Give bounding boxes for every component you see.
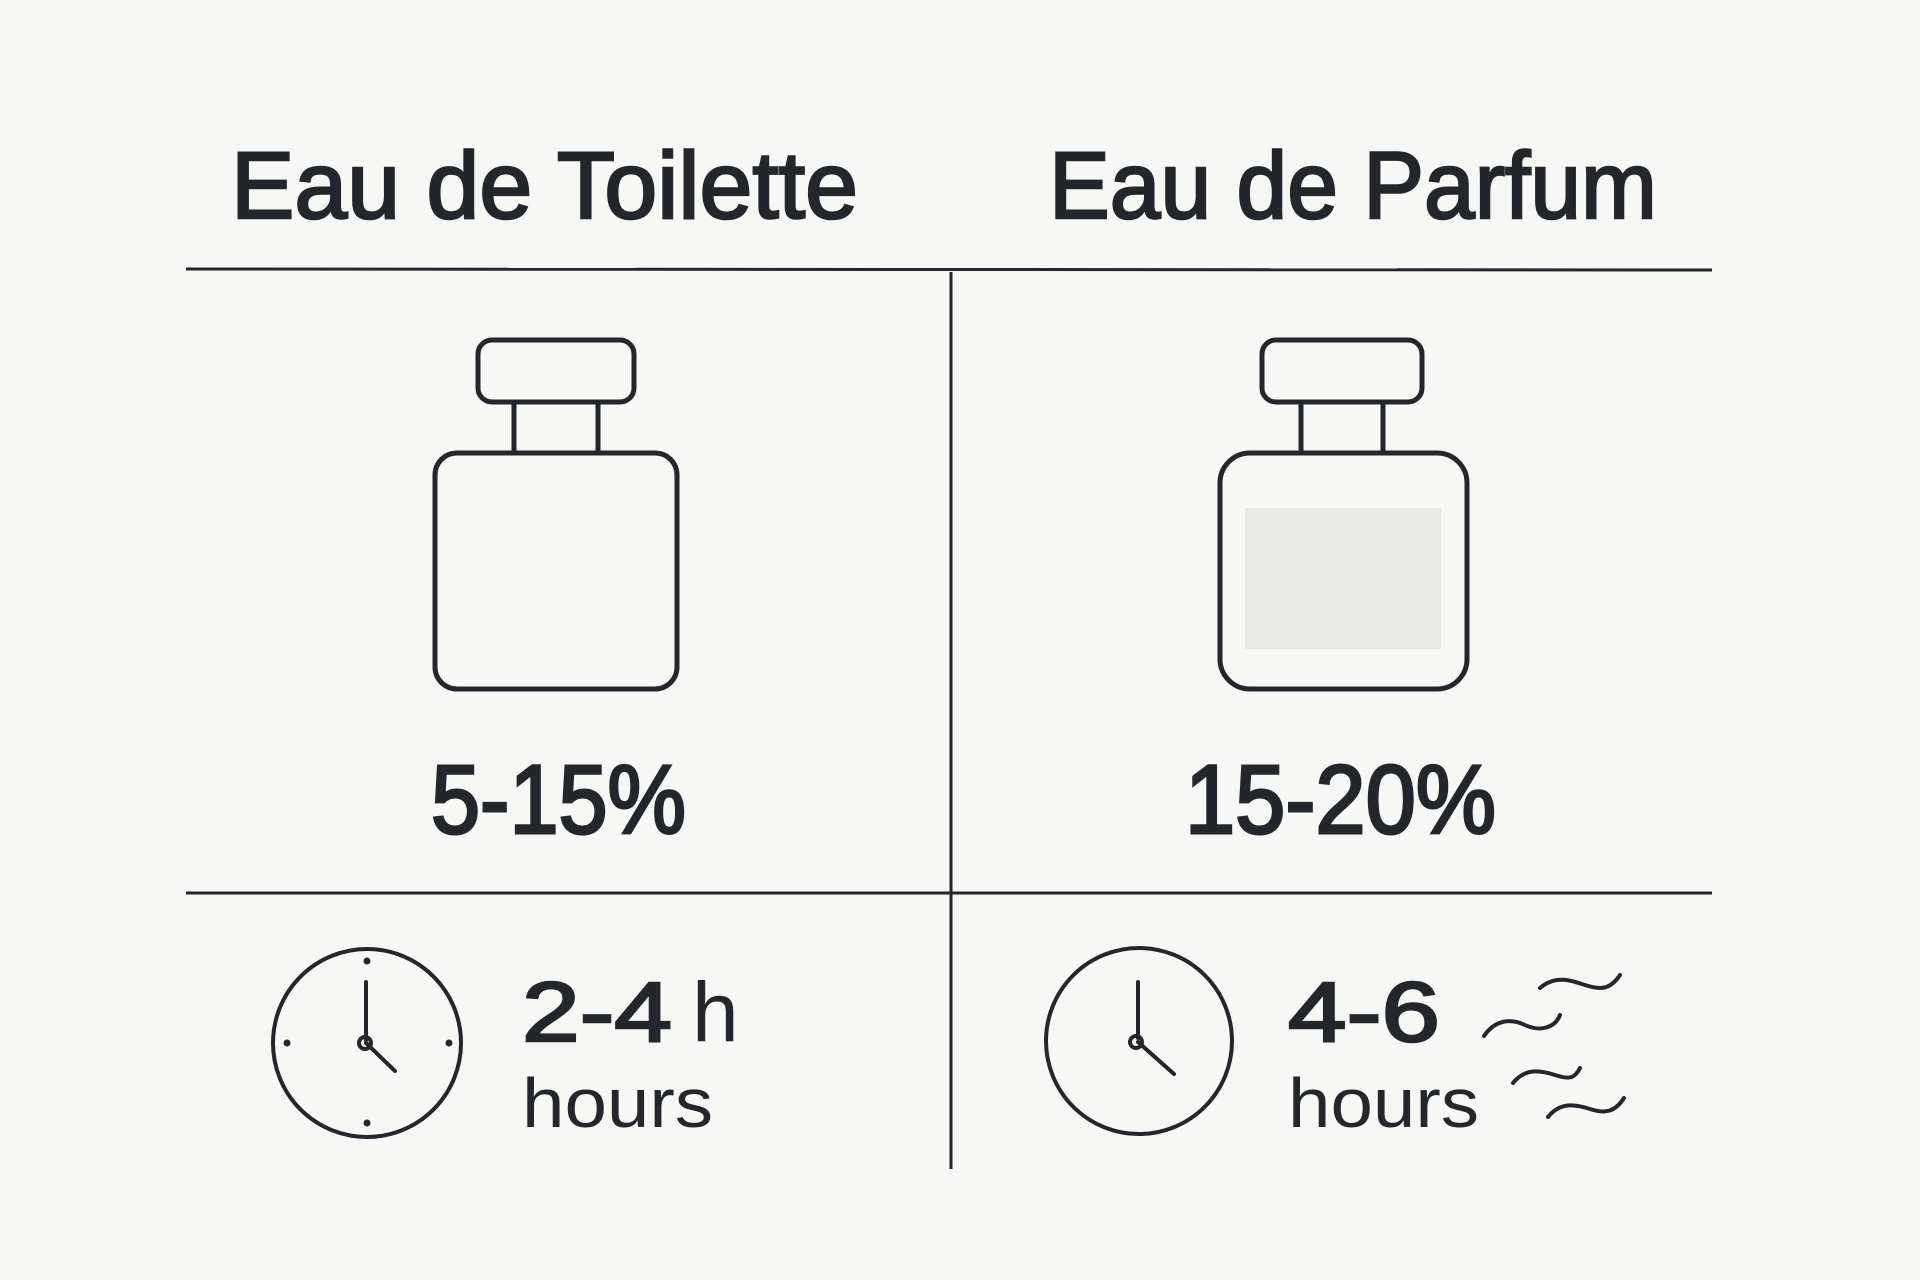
text: 4-6 hours: hours	[1288, 1064, 1479, 1142]
icon: scent waves	[1484, 975, 1624, 1117]
title: Eau de Parfum: Eau de Parfum	[1049, 133, 1657, 239]
text: 5-15%: 5-15%	[431, 745, 686, 854]
icon: clock right	[1046, 948, 1232, 1134]
text: 2-4 h hours	[522, 965, 739, 1142]
title: Eau de Toilette: Eau de Toilette	[231, 133, 858, 239]
text: 2-4 h hours: h	[692, 965, 739, 1059]
text: 2-4 h hours: hours	[522, 1064, 713, 1142]
icon: bottle left	[435, 340, 677, 689]
text: 4-6 hours	[1288, 965, 1479, 1142]
text: 15-20%: 15-20%	[1185, 745, 1496, 854]
text: 2-4 h hours: 2-4	[522, 965, 672, 1059]
icon: bottle right	[1220, 340, 1467, 689]
text: 4-6 hours: 4-6	[1288, 965, 1440, 1059]
icon: clock left	[273, 949, 461, 1137]
